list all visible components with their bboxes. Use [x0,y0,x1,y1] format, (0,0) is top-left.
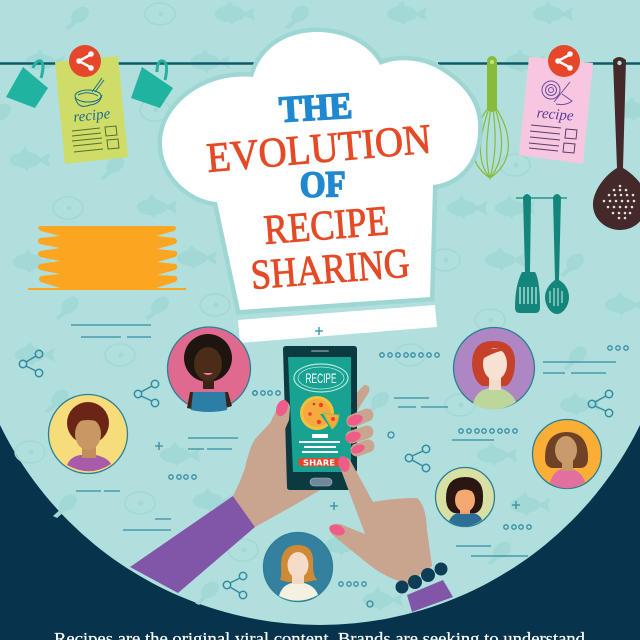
share button: SHARE [303,458,335,468]
recipe text lines [299,436,340,452]
icon: stack of plates [28,226,186,290]
recipe badge: RECIPE [306,370,336,386]
share badge [548,45,580,77]
recipe badge [294,364,348,392]
title: THE [278,86,353,131]
icon: pizza [300,396,340,430]
recipe script: recipe [536,105,575,125]
left hand back [233,385,369,527]
right sleeve [407,580,453,612]
icon: whisk [473,56,508,178]
icon: right mug [131,61,173,108]
share button [298,458,342,468]
arm: left sleeve [130,496,255,593]
phone [283,346,357,490]
avatar: blonde woman on blue [264,532,332,602]
left thumb [262,398,290,450]
decorative lines [71,325,616,556]
title: SHARING [249,241,411,299]
recipe list [529,125,577,153]
icon: teal spatula and spoon [515,194,569,314]
title [205,86,433,299]
title: OF [299,164,346,206]
recipe card: pink [519,45,593,164]
icon: slotted ladle [593,57,640,230]
avatar: woman on pink [168,327,250,412]
chef hat [162,32,478,343]
bracelet [396,562,448,594]
icon: left mug [6,61,48,108]
dot rows [169,346,628,607]
recipe list [72,126,119,152]
left fingers [344,413,368,455]
clothes line [0,62,640,65]
right hand [328,455,432,584]
icon: bowl [75,78,104,106]
avatar: woman on green [436,468,494,526]
avatar: woman on orange [532,420,602,488]
share icons [19,350,613,599]
recipe card: yellow [55,45,128,164]
icon: meat roll [542,81,572,105]
title: RECIPE [262,198,390,254]
recipe script: recipe [73,106,111,126]
avatar: woman on yellow [48,394,128,474]
avatar: red-haired woman on purple [454,328,534,410]
share badge [69,45,101,77]
title: EVOLUTION [205,117,433,182]
home button [310,478,332,486]
